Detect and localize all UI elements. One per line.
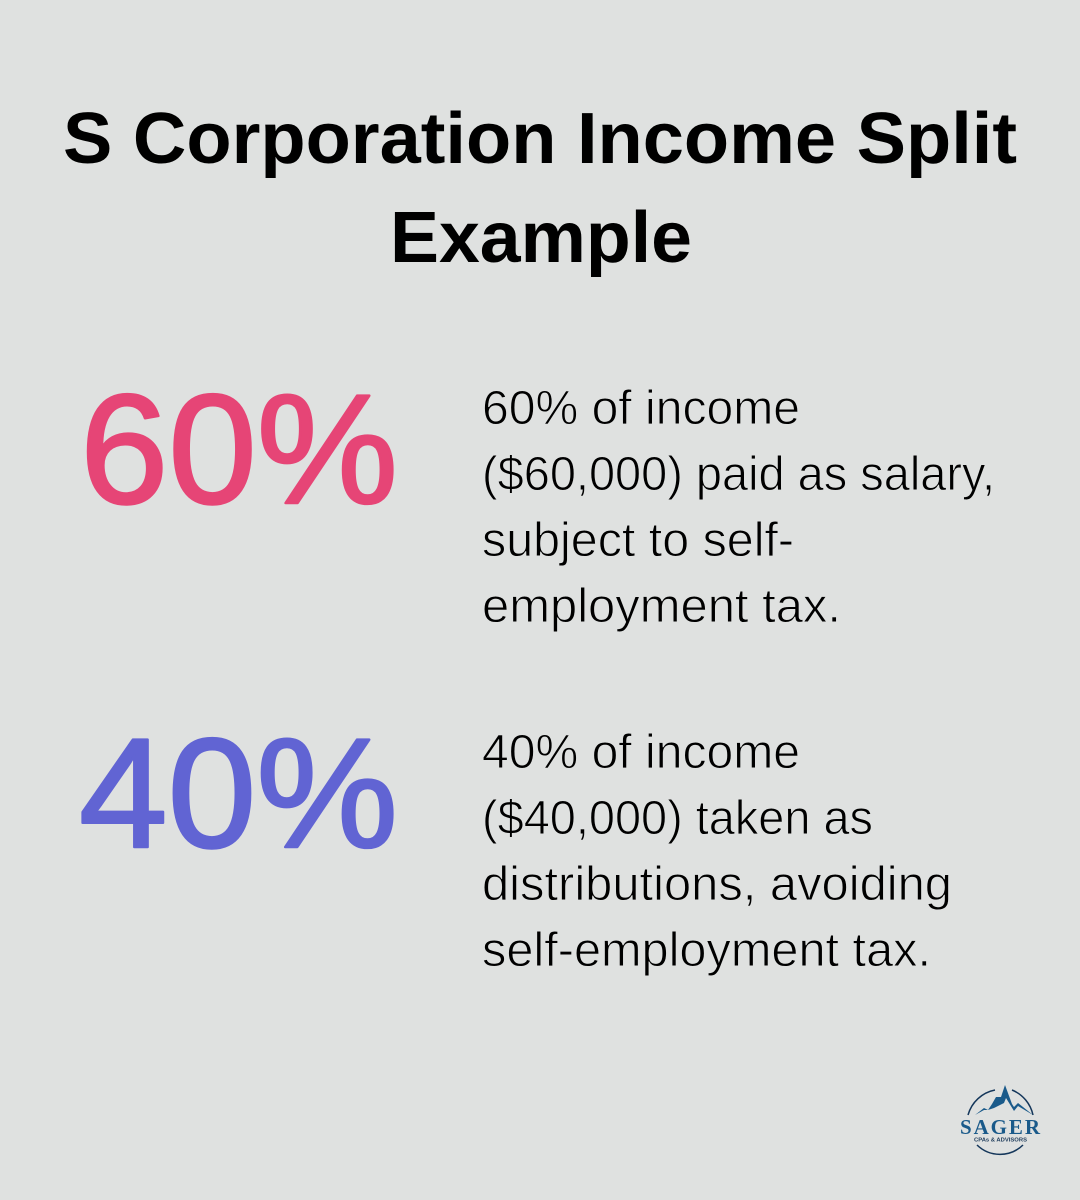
text block: 40% description (482, 726, 952, 977)
text block: 60% description: ($60,000) paid as salary, (482, 448, 995, 501)
logo: Sager CPAs & Advisors: CPAs & ADVISORS (974, 1138, 1027, 1144)
text block: 40% description: self-employment tax. (482, 924, 931, 977)
title: Example (390, 198, 692, 278)
text block: 60% description: 60% of income (482, 382, 800, 435)
title (63, 99, 1017, 278)
text block: 60% description: employment tax. (482, 580, 841, 633)
title: S Corporation Income Split (63, 99, 1017, 179)
logo: Sager CPAs & Advisors: SAGER (960, 1115, 1041, 1139)
statistic: 60%: 60% (80, 363, 398, 537)
statistic: 40%: 40% (79, 707, 398, 881)
text block: 60% description: subject to self- (482, 514, 794, 567)
text block: 40% description: 40% of income (482, 726, 800, 779)
text block: 40% description: distributions, avoiding (482, 858, 952, 911)
text block: 40% description: ($40,000) taken as (482, 792, 873, 845)
logo: Sager CPAs & Advisors (960, 1085, 1041, 1154)
text block: 60% description (482, 382, 995, 633)
